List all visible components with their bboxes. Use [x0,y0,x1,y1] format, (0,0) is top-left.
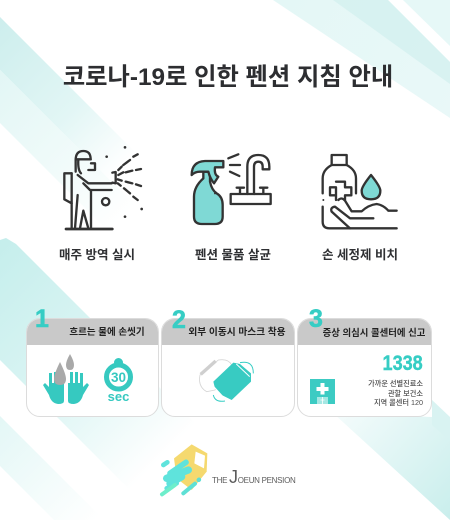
icon: disinfection worker spraying [63,146,143,230]
panel header [162,319,294,345]
number 3: 3 [309,305,323,333]
panel heading: 흐르는 물에 손씻기 [69,327,145,338]
icon: 30 second timer: sec [108,389,129,404]
icon: wet hands [43,354,89,404]
icon: spray bottle and faucet [190,153,272,226]
hotline details: 지역 콜센터 120 [374,398,423,407]
panel: report symptoms [297,318,432,417]
panel header [27,319,158,345]
icon: 30 second timer [104,358,133,404]
logo mark [160,444,208,496]
icon: 30 second timer: 30 [111,370,126,385]
label: weekly disinfection: 매주 방역 실시 [59,248,135,262]
logo wordmark: THE JOEUN PENSION [212,467,295,487]
hotline details [368,379,423,407]
label: hand sanitizer placement: 손 세정제 비치 [322,248,398,262]
icon: hand sanitizer with hand and droplet [322,154,398,230]
panel heading: 증상 의심시 콜센터에 신고 [323,327,425,338]
label: sanitizing pension items: 펜션 물품 살균 [195,248,271,262]
title: 코로나-19로 인한 펜션 지침 안내 [63,64,393,91]
number 2: 2 [172,306,186,334]
icon: face masks [199,359,254,402]
panel heading: 외부 이동시 마스크 착용 [188,327,286,338]
panel: wear a mask [161,318,295,417]
panel header [298,319,431,345]
icon: hospital [310,379,335,404]
hotline details: 가까운 선별진료소 [368,379,423,388]
panel: wash hands [26,318,159,417]
logo: The Joeun Pension [160,444,296,496]
hotline details: 관할 보건소 [388,388,423,398]
number 1: 1 [35,305,49,333]
hotline number: 1338 [383,352,423,375]
